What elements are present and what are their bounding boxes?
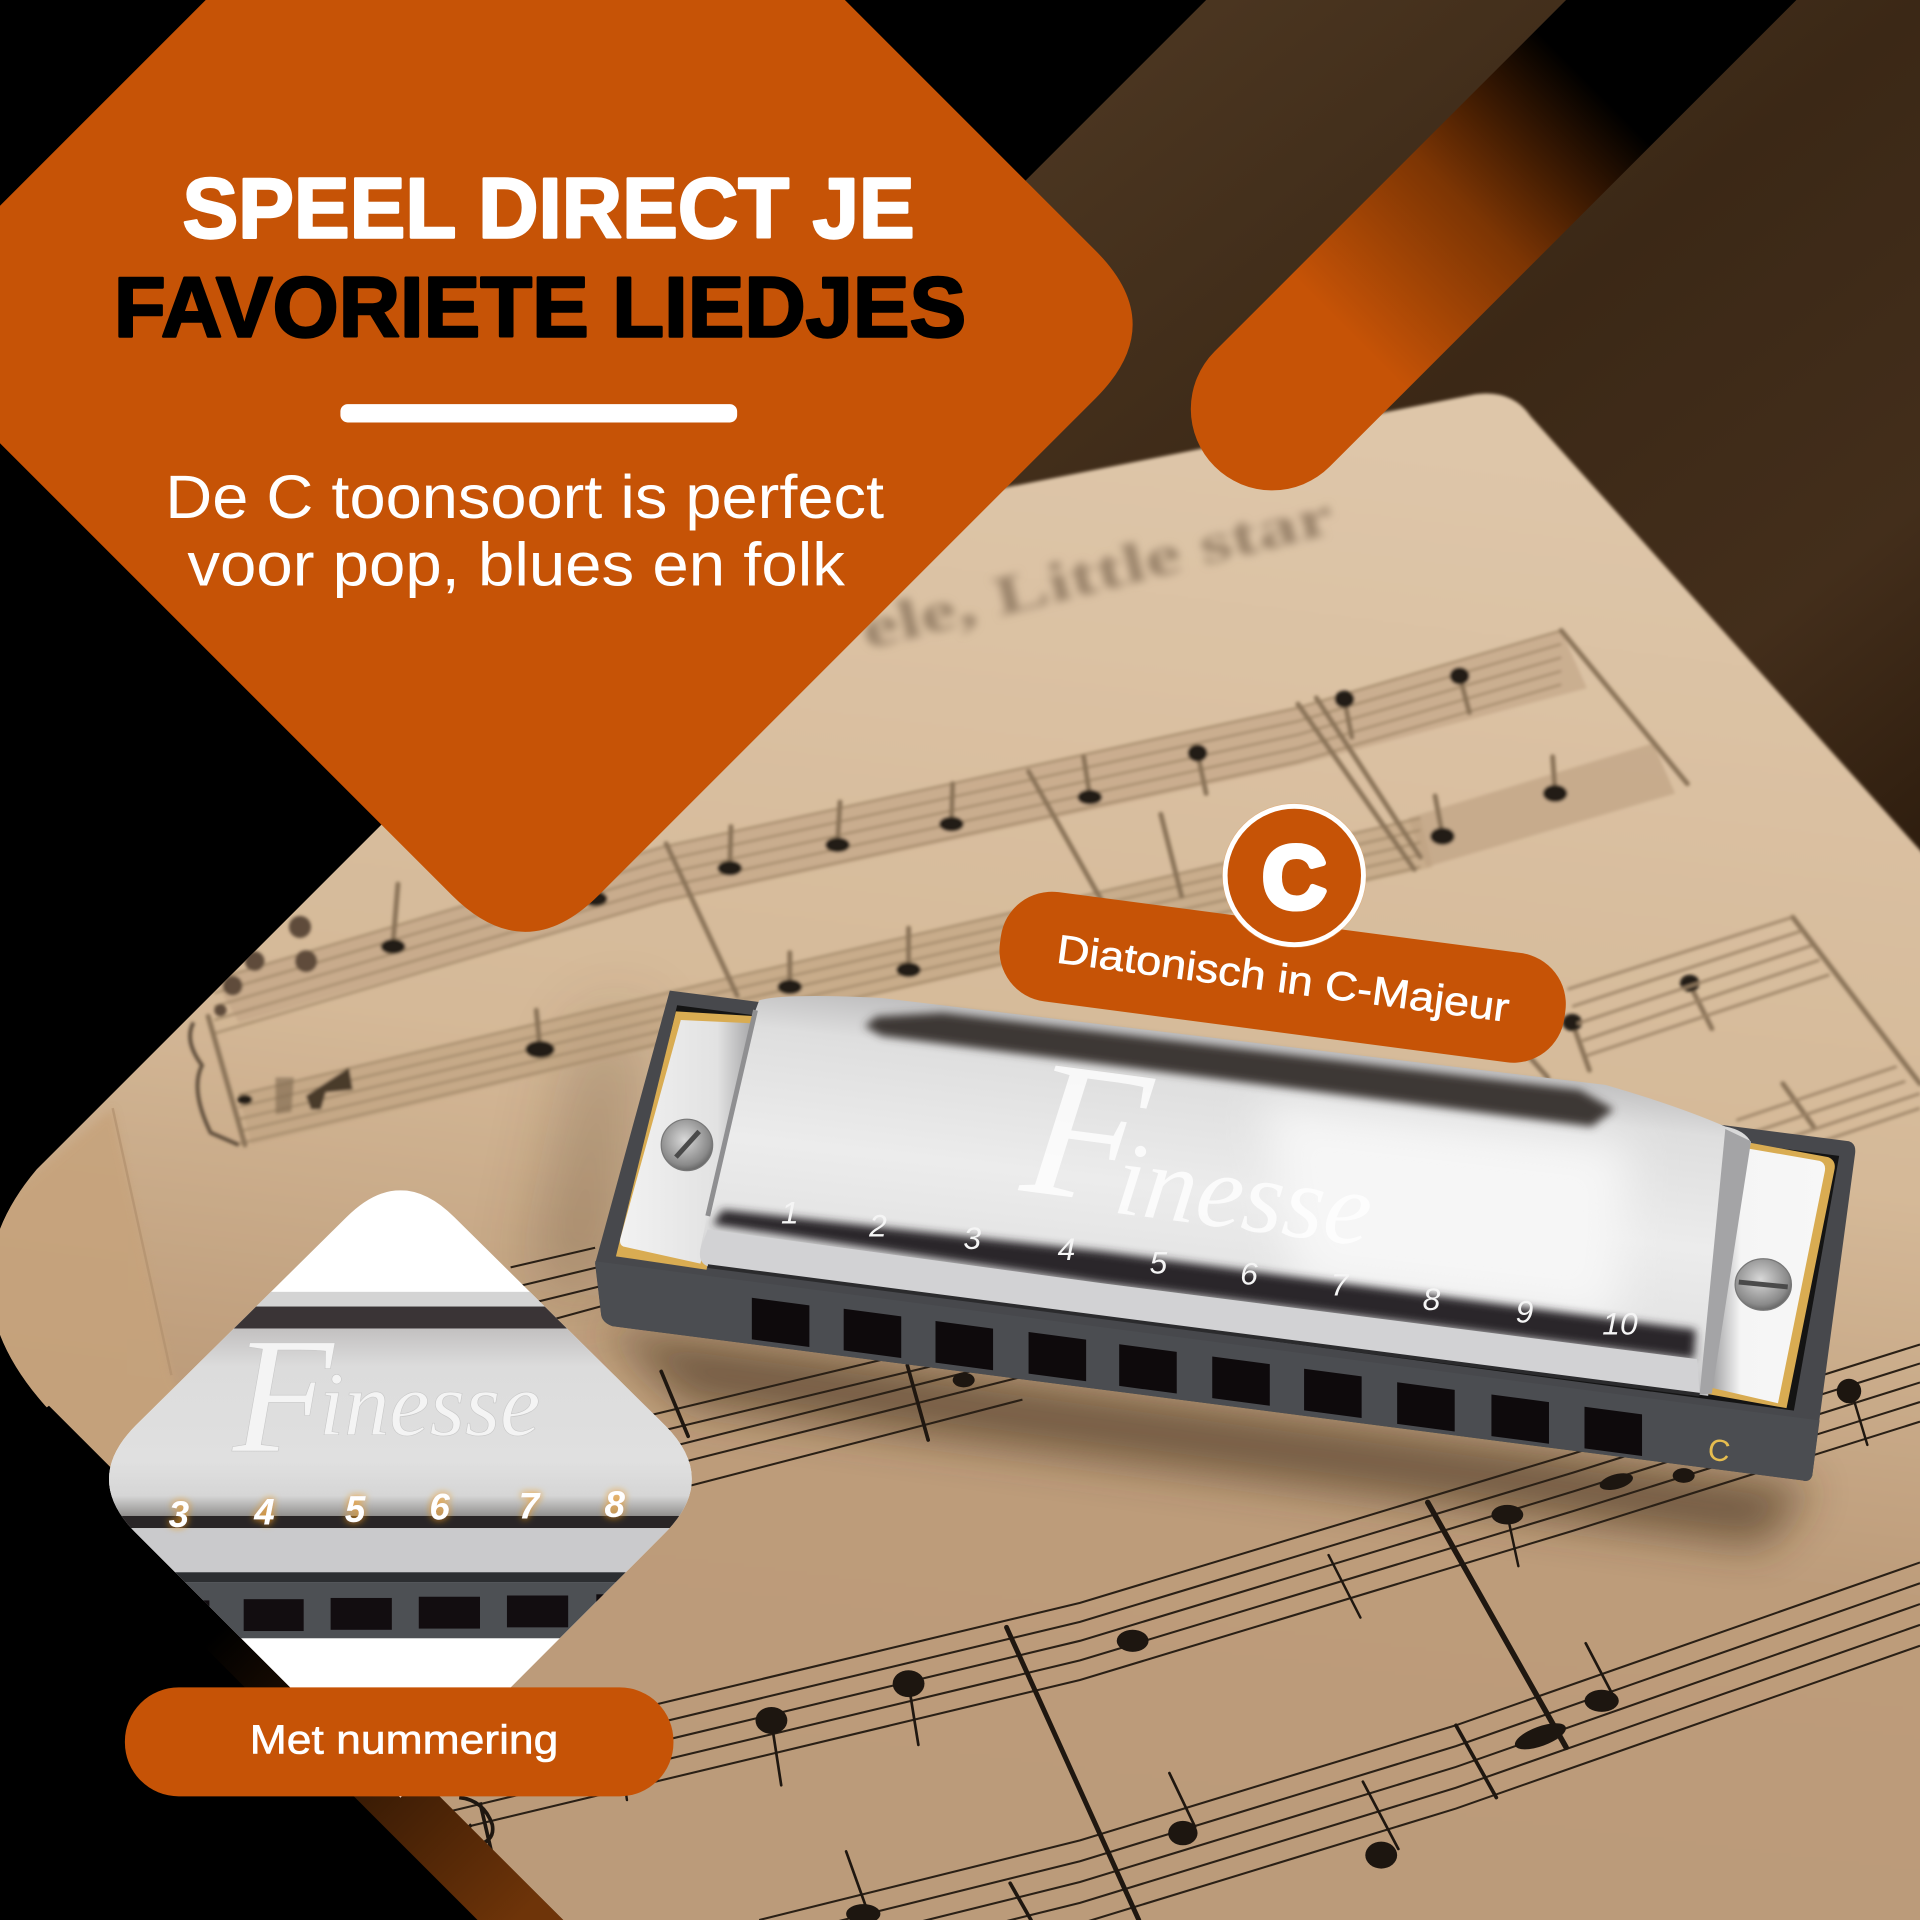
inset brand: inesse [319, 1354, 540, 1455]
sharp staff and notes, lower page [441, 1248, 1920, 1920]
hole numbers: 2 [868, 1208, 887, 1244]
blurred song title on page: ele, Little star [855, 484, 1339, 662]
inset glowing numbers: 3 [169, 1494, 190, 1535]
right gold plate [1704, 1142, 1835, 1408]
left gold plate [616, 1011, 759, 1270]
callout: met nummering [125, 1687, 673, 1796]
reed holes [752, 1298, 1642, 1456]
inset glowing numbers: 7 [519, 1485, 541, 1526]
panel: orange headline diamond [0, 0, 1133, 932]
engraved brand: inesse [1109, 1119, 1379, 1269]
icon: key C badge: C [1262, 827, 1326, 926]
key letter: C [1706, 1433, 1732, 1469]
inset brand: F [232, 1304, 336, 1487]
comb front face [595, 1261, 1820, 1481]
harmonica tray [595, 991, 1855, 1481]
hole numbers: 6 [1240, 1255, 1258, 1291]
inset glowing numbers: 4 [253, 1491, 275, 1532]
screws [661, 1119, 1791, 1310]
callout: diatonic in C major [993, 803, 1572, 1069]
hole numbers: 8 [1423, 1281, 1441, 1317]
hole numbers: 5 [1150, 1244, 1168, 1280]
inset glowing numbers [169, 1484, 625, 1535]
inset reed holes [203, 1594, 604, 1631]
hole numbers: 4 [1058, 1231, 1075, 1267]
title [114, 161, 966, 356]
title: FAVORIETE LIEDJES [114, 260, 966, 356]
bottom-left gradient band [0, 1406, 563, 1920]
subtitle [165, 463, 884, 598]
inset glowing numbers: 5 [345, 1489, 366, 1530]
hole numbers: 1 [781, 1194, 799, 1230]
icon: key C badge [1222, 803, 1367, 948]
cover plate [700, 996, 1751, 1396]
subtitle: De C toonsoort is perfect [165, 463, 884, 531]
pill [125, 1687, 673, 1796]
inset glowing numbers: 6 [429, 1487, 450, 1528]
engraved brand: F [1011, 1017, 1162, 1249]
pill text: Met nummering [250, 1716, 558, 1762]
hole numbers: 7 [1331, 1267, 1350, 1303]
divider bar [340, 404, 737, 422]
hole numbers: 9 [1516, 1293, 1534, 1329]
inset glowing numbers: 8 [604, 1484, 625, 1525]
hole numbers: 10 [1602, 1306, 1638, 1342]
harmonica product [595, 991, 1855, 1481]
hole numbers: 3 [963, 1220, 981, 1256]
title: SPEEL DIRECT JE [182, 161, 915, 257]
callout text: Diatonisch in C-Majeur [1054, 926, 1512, 1031]
panel: numbering close-up inset [109, 1190, 692, 1798]
subtitle: voor pop, blues en folk [187, 530, 845, 598]
callout pill [993, 885, 1572, 1069]
hole numbers [781, 1194, 1638, 1342]
blurred staff and notes, upper page [190, 631, 1920, 1157]
top-right gradient stripe [1272, 0, 1886, 409]
